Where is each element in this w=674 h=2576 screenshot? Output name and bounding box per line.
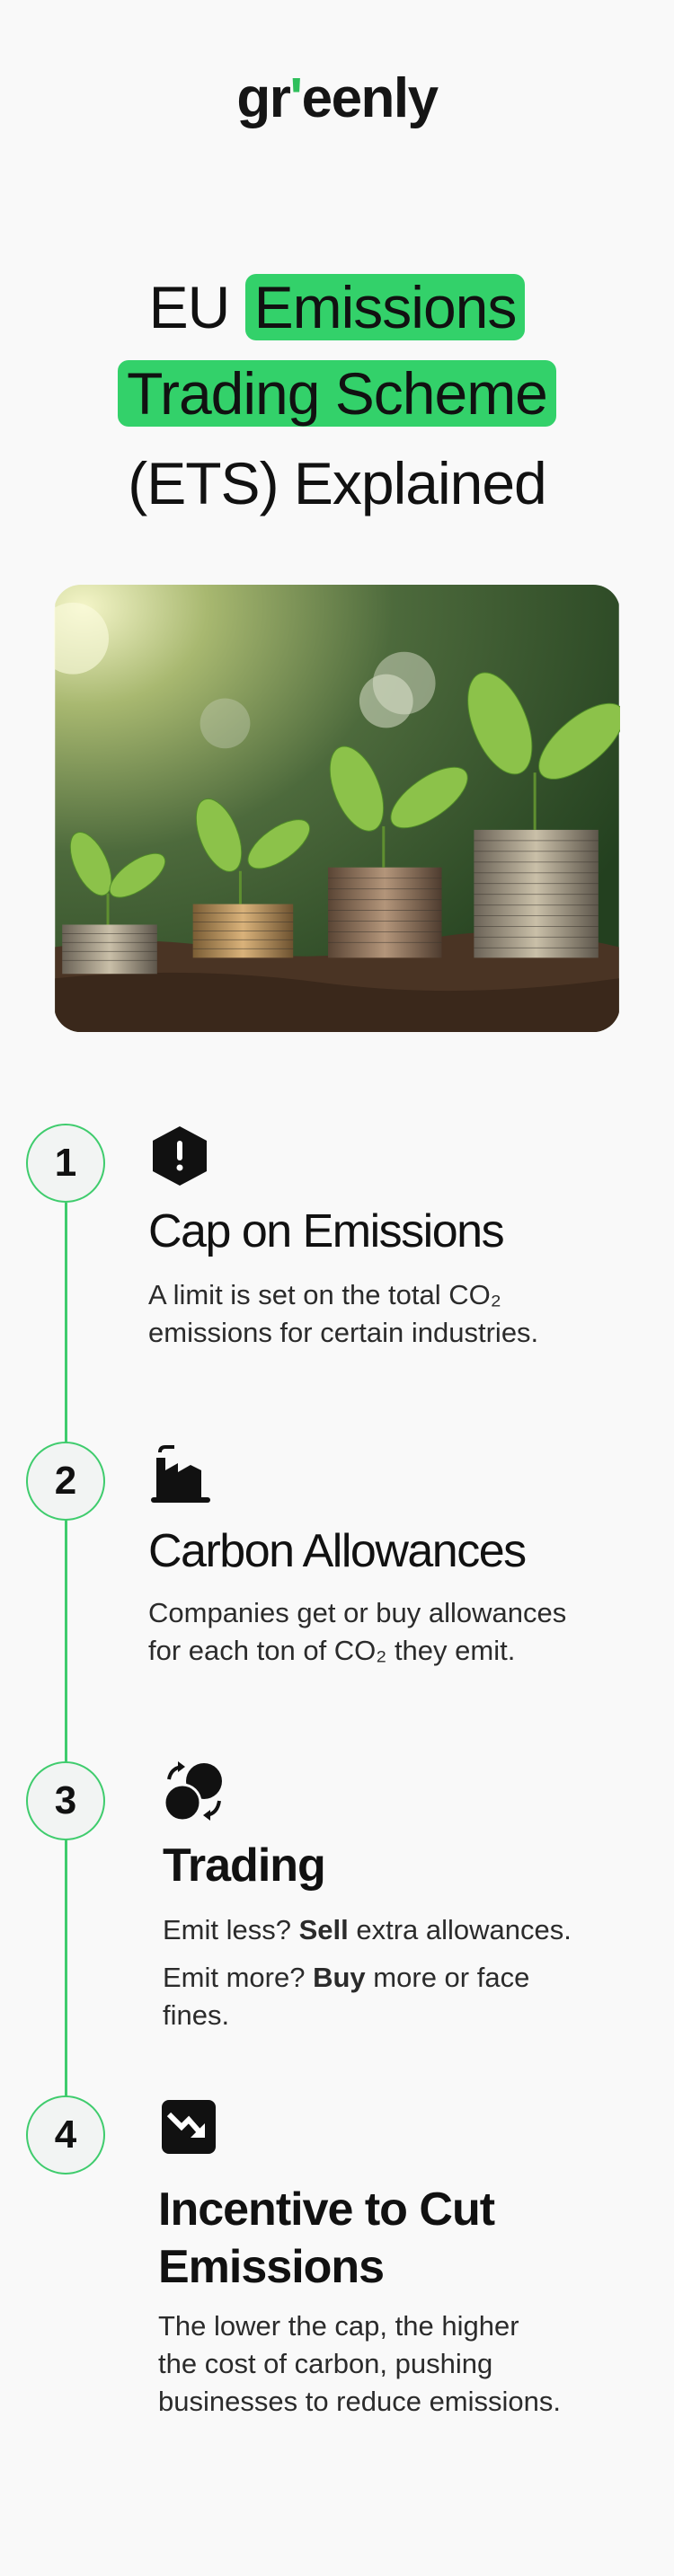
heading: Incentive to Cut — [158, 2183, 494, 2236]
icon: trading coins — [165, 1761, 222, 1821]
number circle 4 — [26, 2095, 105, 2175]
text: emissions for certain industries. — [148, 1317, 538, 1348]
number circle 3: 3 — [55, 1778, 76, 1822]
icon: trending down — [162, 2100, 216, 2154]
text — [158, 2310, 561, 2417]
step 3 — [26, 1761, 572, 2031]
text — [148, 1279, 538, 1348]
heading: Cap on Emissions — [148, 1205, 503, 1257]
step 1 — [26, 1124, 538, 1348]
step 3: fines. — [163, 1999, 229, 2031]
text: businesses to reduce emissions. — [158, 2386, 561, 2417]
text: Companies get or buy allowances — [148, 1597, 566, 1628]
text: The lower the cap, the higher — [158, 2310, 519, 2342]
soil — [55, 932, 619, 1032]
text — [148, 1597, 566, 1666]
timeline line — [65, 1203, 67, 2097]
number circle 1 — [26, 1124, 105, 1203]
title — [118, 274, 556, 516]
heading: Emissions — [158, 2241, 384, 2293]
number circle 1: 1 — [55, 1141, 76, 1185]
text: the cost of carbon, pushing — [158, 2348, 492, 2379]
text: A limit is set on the total CO₂ — [148, 1279, 501, 1310]
number circle 2 — [26, 1442, 105, 1521]
text: for each ton of CO₂ they emit. — [148, 1635, 515, 1666]
icon: factory — [151, 1445, 210, 1503]
seedlings — [62, 664, 636, 924]
number circle 3 — [26, 1761, 105, 1840]
heading: Trading — [163, 1839, 325, 1892]
icon: hexagon warning — [153, 1126, 207, 1186]
heading — [158, 2183, 494, 2293]
text: Emit less? Sell extra allowances. — [163, 1914, 572, 1945]
title: (ETS) Explained — [128, 450, 546, 516]
step 3: Emit more? Buy more or face — [163, 1962, 529, 1993]
step 2 — [26, 1442, 566, 1666]
hero image: coins and seedlings — [54, 585, 620, 1032]
number circle 2: 2 — [55, 1459, 76, 1503]
title: EU Emissions — [149, 274, 516, 340]
number circle 4: 4 — [55, 2113, 76, 2157]
logo: gr'eenly — [236, 67, 438, 129]
heading: Carbon Allowances — [148, 1525, 526, 1577]
stacks — [62, 924, 157, 974]
title: Trading Scheme — [127, 360, 547, 427]
step 4 — [26, 2095, 561, 2417]
